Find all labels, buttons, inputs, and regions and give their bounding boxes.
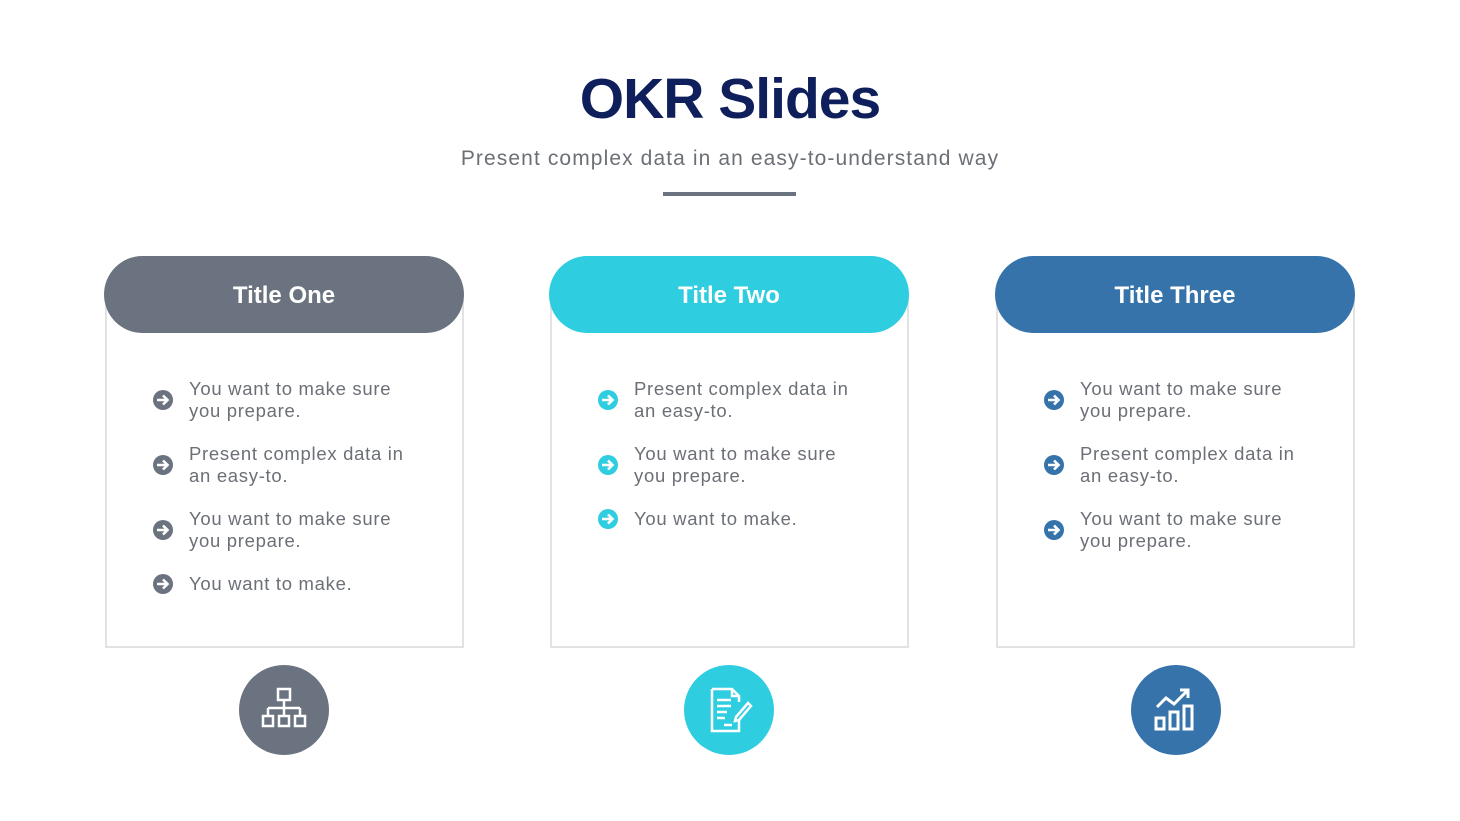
header: Title Three: Title Three bbox=[1115, 282, 1235, 309]
list: card three: Present complex data in bbox=[1080, 443, 1295, 464]
list: card three: You want to make sure bbox=[1080, 508, 1282, 529]
list: card three: you prepare. bbox=[1080, 400, 1192, 421]
list: card one: an easy-to. bbox=[189, 465, 288, 486]
header: Title One: Title One bbox=[233, 282, 335, 309]
list: card three bbox=[1044, 378, 1295, 551]
panel: card one bbox=[105, 300, 464, 648]
list: card two: You want to make. bbox=[634, 508, 797, 529]
list: card two: you prepare. bbox=[634, 465, 746, 486]
header: Title Two bbox=[549, 256, 909, 333]
panel: card two bbox=[550, 300, 909, 648]
title: OKR Slides bbox=[580, 67, 880, 131]
header: Title One bbox=[104, 256, 464, 333]
list: card three: You want to make sure bbox=[1080, 378, 1282, 399]
header: Title Two: Title Two bbox=[678, 282, 780, 309]
icon: growth chart bbox=[1131, 665, 1221, 755]
subtitle: Present complex data in an easy-to-understand way bbox=[461, 147, 999, 170]
header: Title Three bbox=[995, 256, 1355, 333]
list: card two: You want to make sure bbox=[634, 443, 836, 464]
list: card two: an easy-to. bbox=[634, 400, 733, 421]
icon: document with pen bbox=[684, 665, 774, 755]
list: card one: You want to make. bbox=[189, 573, 352, 594]
list: card one: Present complex data in bbox=[189, 443, 404, 464]
list: card three: an easy-to. bbox=[1080, 465, 1179, 486]
icon: hierarchy bbox=[239, 665, 329, 755]
list: card two bbox=[598, 378, 849, 529]
list: card one: You want to make sure bbox=[189, 378, 391, 399]
list: card one: You want to make sure bbox=[189, 508, 391, 529]
list: card two: Present complex data in bbox=[634, 378, 849, 399]
list: card three: you prepare. bbox=[1080, 530, 1192, 551]
list: card one bbox=[153, 378, 404, 594]
list: card one: you prepare. bbox=[189, 400, 301, 421]
title underline bbox=[663, 192, 796, 196]
panel: card three bbox=[996, 300, 1355, 648]
list: card one: you prepare. bbox=[189, 530, 301, 551]
